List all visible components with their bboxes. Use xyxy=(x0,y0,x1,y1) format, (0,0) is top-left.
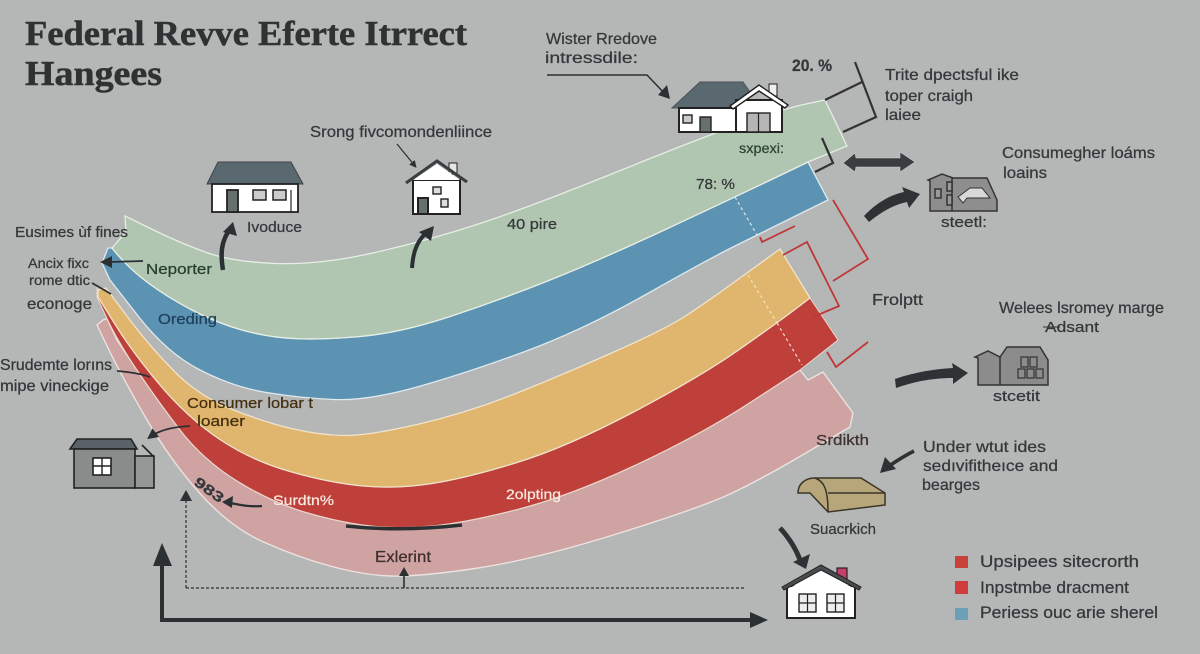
top label: Wister Redove xyxy=(545,31,670,99)
band: pink xyxy=(97,318,853,576)
band labels: loaner xyxy=(197,413,245,430)
label: under: bearges xyxy=(922,477,980,494)
label: top right text: toper craigh xyxy=(885,88,973,105)
legend: Periess ouc arie sherel xyxy=(980,604,1158,622)
icon: gray house left xyxy=(70,439,154,488)
icon: house left xyxy=(207,162,303,212)
icon: top house xyxy=(672,82,788,132)
band labels: Neporter xyxy=(146,261,212,278)
left labels: rome dtic xyxy=(29,273,90,288)
left labels: econoge xyxy=(27,296,92,313)
legend: Upsipees sitecrorth xyxy=(980,553,1139,571)
label: Frolptt: Frolptt xyxy=(872,292,924,309)
label: consumer loans: Consumegher loáms xyxy=(1002,145,1155,162)
left labels xyxy=(0,224,128,395)
red brackets xyxy=(760,200,868,367)
top label: Wister Redove: Wister Rredove xyxy=(546,31,657,48)
label: Welees xyxy=(999,300,1164,336)
label: Ivoduce: Ivoduce xyxy=(247,219,302,236)
label: 983: 983 xyxy=(191,473,228,506)
band labels: Surdtn% xyxy=(273,492,334,508)
label: stcetit: stcetit xyxy=(993,388,1041,405)
label: top right text: laiee xyxy=(885,107,921,124)
label: under: sedıvifitheıce and xyxy=(923,458,1058,475)
left arrows xyxy=(92,256,262,508)
left labels: Ancix fixc xyxy=(28,256,89,271)
top label: Wister Redove: intressdile: xyxy=(545,50,638,67)
label: steet: steetl: xyxy=(941,215,987,231)
left labels: Srudemte lorıns xyxy=(0,357,112,374)
left labels: Eusimes ùf fines xyxy=(15,224,128,241)
band labels xyxy=(146,140,869,566)
band labels: 40 pire xyxy=(507,216,557,233)
icon: box xyxy=(798,478,885,512)
title: Hangees xyxy=(25,54,162,93)
band: blue xyxy=(102,162,828,400)
icon: house bottom xyxy=(782,565,861,618)
label: under: Under wtut ides xyxy=(923,439,1046,456)
left labels: mipe vineckige xyxy=(0,378,109,395)
label: Welees: Adsant xyxy=(1045,319,1100,336)
label: top right text: Trite dpectsful ike xyxy=(885,67,1019,84)
band labels: Exlerint xyxy=(375,549,432,566)
label: under xyxy=(922,439,1058,494)
band labels: Srdikth xyxy=(816,432,869,449)
label: 20%: 20. % xyxy=(792,56,832,75)
arrow: to house bottom xyxy=(780,528,810,569)
axes xyxy=(153,490,768,628)
legend xyxy=(955,553,1158,622)
label: Srong: Srong fivcomondenliince xyxy=(310,124,492,141)
band labels: 78: % xyxy=(696,176,735,193)
arrow: to house xyxy=(397,144,415,166)
band labels: Oreding xyxy=(158,311,217,328)
band: green xyxy=(112,100,847,339)
arrow: to box xyxy=(880,451,914,473)
icon: building 2 xyxy=(975,347,1048,385)
band: red xyxy=(97,287,838,528)
label: Suacrkich: Suacrkich xyxy=(810,522,876,538)
title xyxy=(25,14,467,93)
bracket: top right xyxy=(815,62,876,172)
band labels: sxpexi: xyxy=(739,140,784,156)
band labels: 2olpting xyxy=(506,486,561,502)
title: Federal Revve Eferte Itrrect xyxy=(25,14,467,53)
arrow: center xyxy=(412,226,434,268)
arrow: to building 2 xyxy=(895,363,968,388)
legend: Inpstmbe dracment xyxy=(980,579,1129,597)
arrow: to building 1 xyxy=(864,187,920,222)
icon: building 1 xyxy=(928,174,997,211)
label: top right text xyxy=(885,67,1019,124)
icon: house center xyxy=(406,161,467,214)
dashed dividers xyxy=(735,197,757,235)
label: consumer loans: loains xyxy=(1003,165,1047,182)
arrow: Ivoduce xyxy=(222,222,237,270)
label: consumer loans xyxy=(1002,145,1155,182)
band labels: Consumer lobar t xyxy=(187,395,314,412)
double arrow xyxy=(843,152,915,172)
label: Welees: Welees lsromey marge xyxy=(999,300,1164,317)
band: yellow xyxy=(98,249,810,487)
